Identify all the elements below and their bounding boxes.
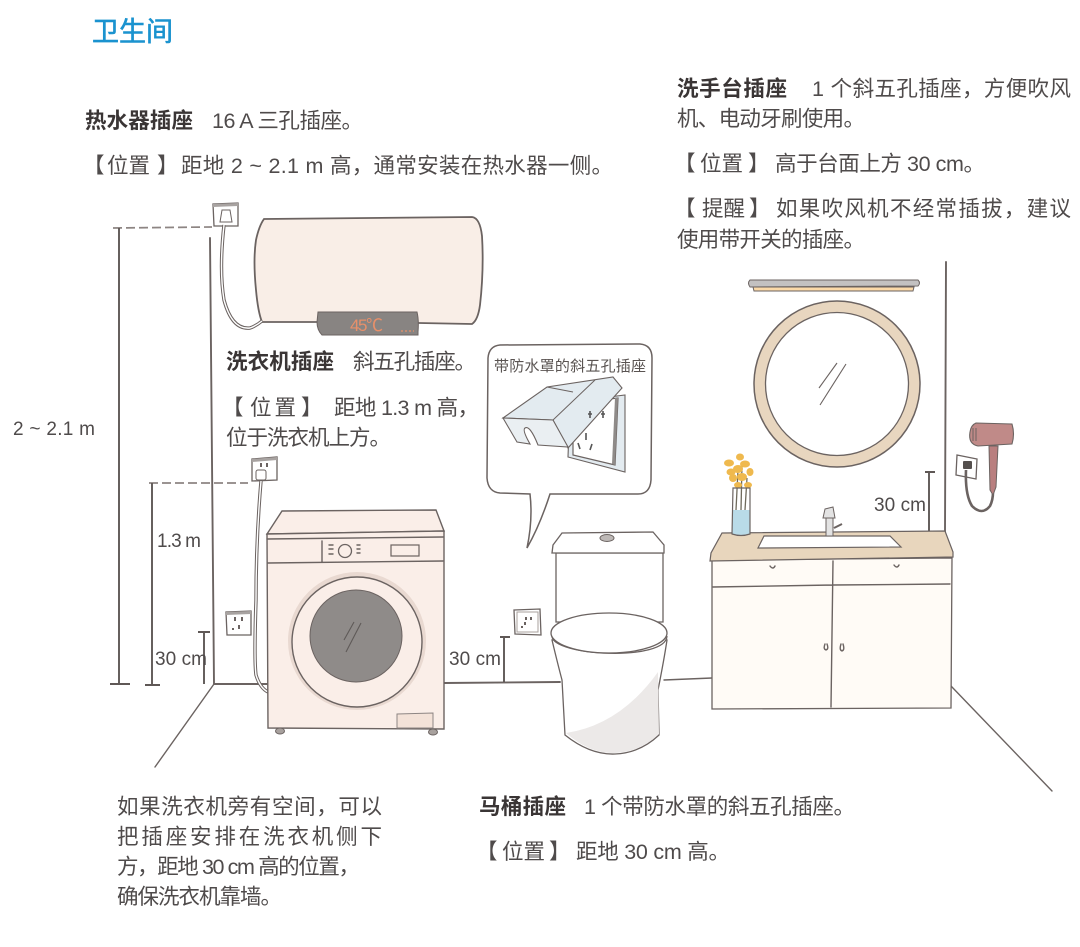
text block: washbasin socket: 如果吹风机不经常插拔，建议	[776, 197, 1071, 221]
toilet	[551, 532, 667, 754]
dimension: 30 cm beside toilet	[449, 637, 510, 682]
title: 卫生间	[92, 17, 173, 47]
text block: water heater socket: 距地 2 ~ 2.1 m 高，通常安装在热水器一侧。	[181, 154, 613, 178]
dryer cable	[966, 470, 993, 511]
text block: water heater socket: 位置	[107, 154, 150, 178]
washer door	[288, 572, 426, 710]
flower stems	[736, 465, 747, 510]
heater display: 45℃	[350, 316, 383, 335]
faucet	[823, 507, 842, 536]
text block: washbasin socket: 高于台面上方 30 cm。	[775, 152, 985, 176]
text block: washbasin socket: 】	[748, 152, 770, 176]
text block: water heater socket: 16 A 三孔插座。	[212, 109, 363, 133]
room walls and floor lines	[155, 238, 1052, 791]
text block: toilet socket: 距地 30 cm 高。	[576, 840, 730, 864]
dimension: 2 to 2.1 m	[13, 227, 212, 684]
text block: washbasin socket: 洗手台插座	[677, 76, 787, 101]
washing machine	[267, 510, 444, 735]
text block: toilet socket	[476, 794, 855, 864]
text block: washbasin socket: 【	[674, 197, 696, 221]
flowers	[724, 454, 754, 488]
cabinet body	[712, 558, 952, 709]
text block: water heater socket: 】	[157, 154, 179, 178]
water heater	[254, 217, 483, 335]
text block: washing machine socket: 斜五孔插座。	[353, 350, 476, 374]
vanity cabinet	[710, 507, 953, 709]
sink	[758, 536, 901, 548]
text block: washing machine socket: 【	[222, 396, 244, 420]
text block: washbasin socket: 机、电动牙刷使用。	[677, 107, 865, 131]
dimension: 2 to 2.1 m: 2 ~ 2.1 m	[13, 419, 95, 440]
washer feet	[276, 728, 438, 735]
toilet socket	[514, 609, 541, 635]
text block: washing machine socket	[222, 349, 479, 450]
text block: washing machine socket: 位置	[250, 396, 296, 420]
text block: water heater socket	[83, 108, 613, 178]
text block: washing machine socket: 位于洗衣机上方。	[226, 426, 391, 450]
text block: washbasin socket	[674, 76, 1071, 252]
text block: washing machine socket: 距地 1.3 m 高，	[334, 396, 479, 420]
low socket beside washer	[226, 611, 251, 635]
dryer head	[970, 423, 1014, 446]
text block: washer side note: 确保洗衣机靠墙。	[117, 885, 282, 909]
dimension: 30 cm above counter	[874, 472, 935, 531]
washer top	[267, 510, 444, 534]
icon: waterproof socket cover	[503, 377, 625, 472]
countertop	[710, 531, 953, 561]
hair dryer and socket	[956, 423, 1014, 511]
toilet bowl	[552, 640, 667, 754]
text block: washer side note: 如果洗衣机旁有空间，可以	[117, 795, 382, 819]
light fixture	[748, 280, 920, 291]
text block: toilet socket: 【	[476, 840, 498, 864]
text block: washer side note: 把插座安排在洗衣机侧下	[117, 825, 382, 849]
text block: toilet socket: 】	[549, 840, 571, 864]
text block: water heater socket: 热水器插座	[85, 108, 193, 133]
washer body	[267, 531, 444, 729]
heater socket and cable	[213, 203, 262, 328]
text block: washbasin socket: 提醒	[702, 197, 745, 221]
text block: toilet socket: 位置	[502, 840, 545, 864]
toilet tank	[556, 553, 663, 622]
vase	[732, 510, 750, 536]
text block: washbasin socket: 1 个斜五孔插座，方便吹风	[812, 77, 1071, 101]
heater display	[317, 312, 418, 335]
text block: washing machine socket: 】	[301, 396, 323, 420]
washer control panel	[267, 537, 443, 563]
dimension: 30 cm left of washer	[155, 632, 210, 684]
washer drawer	[397, 713, 433, 728]
text block: washbasin socket: 使用带开关的插座。	[677, 228, 865, 252]
text block: washbasin socket: 位置	[700, 152, 743, 176]
text block: washer side note	[117, 795, 382, 909]
round mirror	[754, 301, 920, 467]
dimension: 1.3 m	[145, 483, 248, 685]
text block: washing machine socket: 洗衣机插座	[226, 349, 334, 374]
text block: toilet socket: 马桶插座	[479, 794, 566, 819]
text block: washbasin socket: 】	[749, 197, 771, 221]
cabinet handles	[770, 565, 899, 651]
speech bubble	[487, 344, 652, 548]
dimension: 1.3 m: 1.3 m	[157, 531, 201, 552]
dimension: 30 cm left of washer: 30 cm	[155, 649, 207, 670]
toilet lid	[552, 636, 667, 653]
text block: toilet socket: 1 个带防水罩的斜五孔插座。	[584, 795, 855, 819]
dryer handle	[989, 446, 998, 495]
text block: washer side note: 方，距地 30 cm 高的位置，	[117, 855, 360, 879]
flush button	[600, 534, 614, 542]
dryer socket	[956, 455, 977, 479]
dimension: 30 cm above counter: 30 cm	[874, 495, 926, 516]
text block: water heater socket: 【	[83, 154, 105, 178]
dimension: 30 cm beside toilet: 30 cm	[449, 649, 501, 670]
text block: washbasin socket: 【	[674, 152, 696, 176]
flower vase	[724, 454, 754, 536]
washer socket with plug and cable	[252, 457, 277, 692]
bubble caption: 带防水罩的斜五孔插座	[494, 358, 646, 375]
